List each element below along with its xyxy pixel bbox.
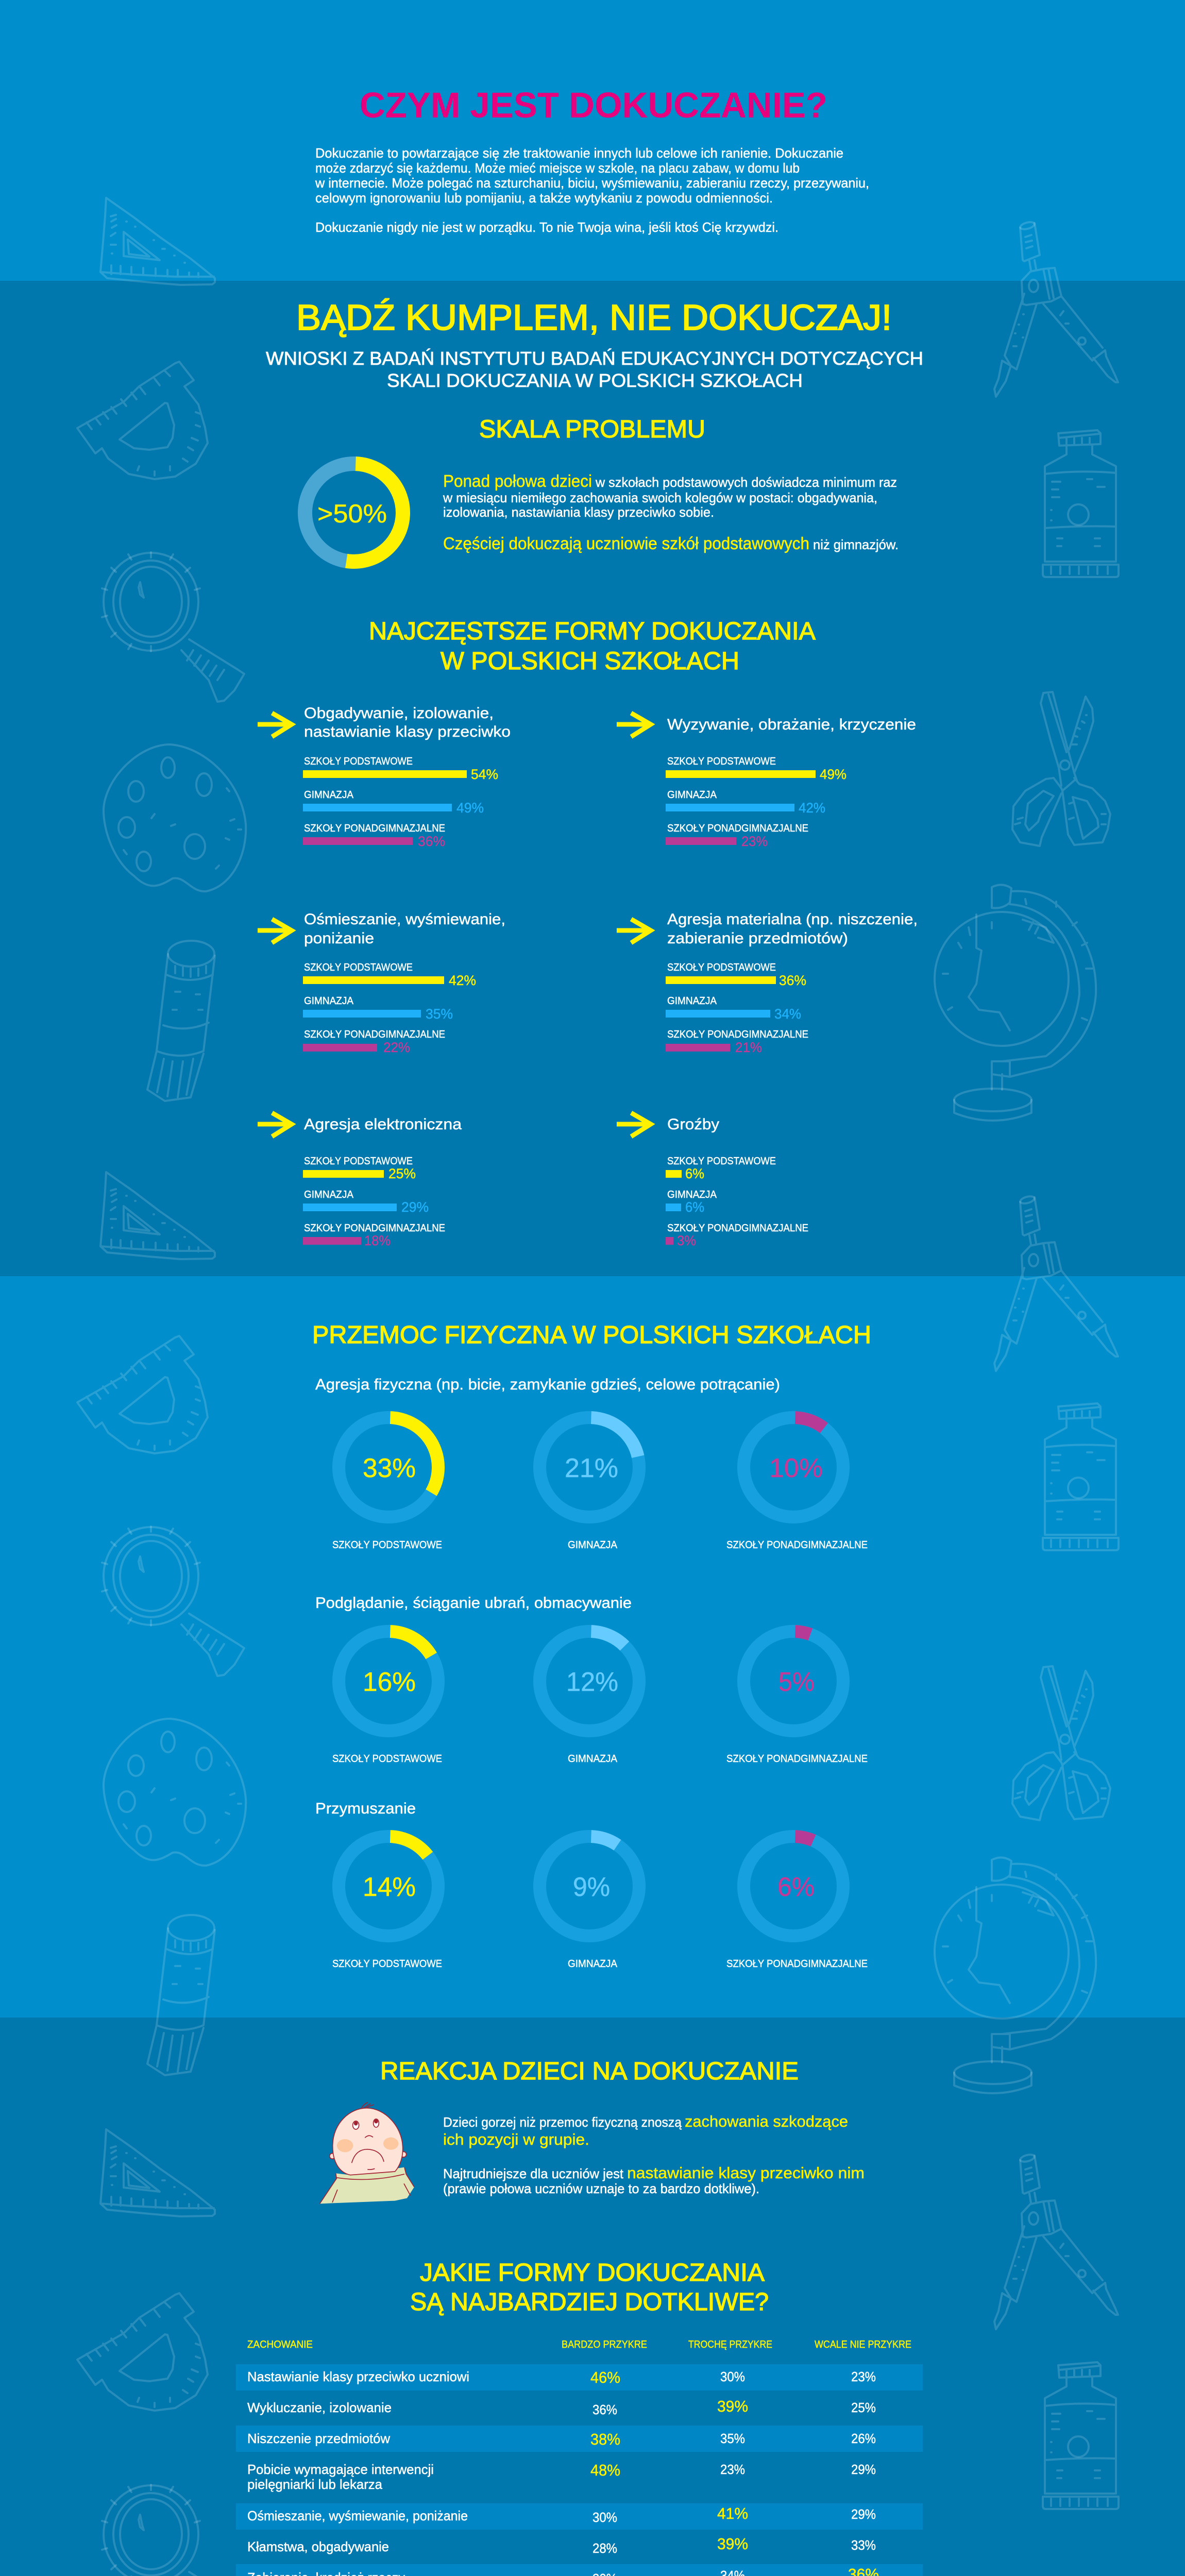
row 1: 46% bbox=[590, 2368, 620, 2386]
panel: groźby: SZKOŁY PODSTAWOWE bbox=[667, 1156, 776, 1167]
donut: przymuszanie podstawowe 14%: 14% bbox=[363, 1872, 416, 1902]
donut: agresja fizyczna gimnazja 21% bbox=[538, 1416, 641, 1551]
table header: WCALE NIE PRZYKRE bbox=[815, 2339, 911, 2350]
text block: reaction: ich pozycji w grupie. bbox=[443, 2130, 589, 2148]
row 6: 28% bbox=[592, 2540, 617, 2556]
panel: agresja elektroniczna: SZKOŁY PONADGIMNAZJALNE bbox=[304, 1223, 445, 1234]
panel: obgadywanie: 36% bbox=[418, 834, 445, 849]
panel: ośmieszanie: 35% bbox=[426, 1006, 453, 1022]
heading: przemoc fizyczna: PRZEMOC FIZYCZNA W POLSKICH SZKOŁACH bbox=[312, 1321, 871, 1349]
row 7 bbox=[236, 2564, 923, 2576]
text block: scale of the problem bbox=[443, 471, 899, 553]
icon: arrow bbox=[258, 713, 292, 737]
donut: przymuszanie gimnazja 9% bbox=[538, 1835, 641, 1970]
panel: agresja materialna: SZKOŁY PODSTAWOWE bbox=[667, 962, 776, 973]
row 2: 39% bbox=[717, 2397, 748, 2415]
text block: definition: Dokuczanie to powtarzające się złe traktowanie innych lub celowe ich ranienie. Dokuczanie bbox=[315, 145, 843, 161]
heading: najczęstsze formy dokuczania bbox=[369, 618, 816, 675]
main title: BĄDŹ KUMPLEM, NIE DOKUCZAJ! bbox=[296, 297, 892, 337]
icon: arrow bbox=[258, 919, 292, 943]
row 4: pielęgniarki lub lekarza bbox=[247, 2477, 383, 2492]
row 4 bbox=[247, 2461, 876, 2492]
panel: agresja materialna: zabieranie przedmiotów) bbox=[667, 930, 848, 947]
donut: more than 50% bbox=[303, 462, 404, 563]
row 2: Wykluczanie, izolowanie bbox=[247, 2400, 392, 2415]
donut: podglądanie podstawowe 16%: SZKOŁY PODSTAWOWE bbox=[332, 1753, 442, 1765]
panel: groźby: SZKOŁY PONADGIMNAZJALNE bbox=[667, 1223, 808, 1234]
table header: TROCHĘ PRZYKRE bbox=[688, 2339, 772, 2350]
heading: najczęstsze formy dokuczania: W POLSKICH SZKOŁACH bbox=[441, 648, 739, 675]
icon: arrow bbox=[258, 1113, 292, 1137]
panel: obgadywanie: SZKOŁY PODSTAWOWE bbox=[304, 756, 413, 767]
panel: agresja elektroniczna: 18% bbox=[364, 1233, 391, 1248]
panel: obgadywanie bbox=[258, 705, 511, 849]
row 6: Kłamstwa, obgadywanie bbox=[247, 2539, 389, 2554]
text block: reaction: (prawie połowa uczniów uznaje to za bardzo dotkliwe). bbox=[443, 2181, 759, 2196]
row 3 bbox=[236, 2426, 923, 2452]
heading: skala problemu: SKALA PROBLEMU bbox=[479, 416, 705, 443]
text block: scale of the problem: niż gimnazjów. bbox=[813, 537, 899, 552]
row 5: 30% bbox=[592, 2510, 617, 2525]
row 4: Pobicie wymagające interwencji bbox=[247, 2462, 434, 2477]
donut: agresja fizyczna podstawowe 33%: 33% bbox=[363, 1453, 416, 1483]
donut: przymuszanie ponadgimnazjalne 6%: 6% bbox=[777, 1872, 815, 1902]
row 1: 23% bbox=[851, 2369, 876, 2384]
panel: agresja elektroniczna: GIMNAZJA bbox=[304, 1189, 354, 1200]
text block: definition: Dokuczanie nigdy nie jest w porządku. To nie Twoja wina, jeśli ktoś Cię krzywdzi. bbox=[315, 219, 778, 235]
donut: podglądanie ponadgimnazjalne 5%: 5% bbox=[778, 1667, 815, 1697]
text block: definition: może zdarzyć się każdemu. Może mieć miejsce w szkole, na placu zabaw, w domu lub bbox=[315, 160, 800, 176]
donut: podglądanie podstawowe 16%: 16% bbox=[363, 1667, 416, 1697]
subtitle: WNIOSKI Z BADAŃ INSTYTUTU BADAŃ EDUKACYJNYCH DOTYCZĄCYCH bbox=[266, 348, 923, 369]
text block: reaction bbox=[443, 2112, 865, 2196]
donut: podglądanie gimnazja 12%: GIMNAZJA bbox=[568, 1753, 618, 1765]
row 1: 30% bbox=[720, 2369, 745, 2384]
text block: reaction: Najtrudniejsze dla uczniów jest bbox=[443, 2166, 624, 2181]
text block: definition bbox=[315, 145, 869, 235]
donut: agresja fizyczna podstawowe 33%: SZKOŁY PODSTAWOWE bbox=[332, 1539, 442, 1551]
panel: ośmieszanie: SZKOŁY PONADGIMNAZJALNE bbox=[304, 1029, 445, 1040]
text block: scale of the problem: Częściej dokuczają uczniowie szkół podstawowych bbox=[443, 534, 809, 553]
donut: przymuszanie gimnazja 9%: 9% bbox=[573, 1872, 610, 1902]
heading: jakie formy: SĄ NAJBARDZIEJ DOTKLIWE? bbox=[410, 2289, 769, 2316]
panel: groźby: 6% bbox=[685, 1166, 704, 1181]
subheading: przymuszanie: Przymuszanie bbox=[315, 1800, 416, 1817]
heading: jakie formy bbox=[410, 2259, 769, 2316]
panel: ośmieszanie: 42% bbox=[449, 973, 476, 988]
row 3: Niszczenie przedmiotów bbox=[247, 2431, 390, 2446]
panel: obgadywanie: GIMNAZJA bbox=[304, 789, 354, 801]
panel: agresja elektroniczna: SZKOŁY PODSTAWOWE bbox=[304, 1156, 413, 1167]
donut: podglądanie gimnazja 12% bbox=[538, 1630, 641, 1765]
panel: wyzywanie: GIMNAZJA bbox=[667, 789, 717, 801]
donut: agresja fizyczna podstawowe 33% bbox=[332, 1416, 442, 1551]
heading: najczęstsze formy dokuczania: NAJCZĘSTSZE FORMY DOKUCZANIA bbox=[369, 618, 816, 645]
text block: reaction: Dzieci gorzej niż przemoc fizyczną znoszą bbox=[443, 2114, 682, 2130]
panel: groźby bbox=[617, 1113, 808, 1248]
donut: przymuszanie ponadgimnazjalne 6% bbox=[726, 1835, 868, 1970]
panel: groźby: Groźby bbox=[667, 1116, 719, 1133]
row 4: 29% bbox=[851, 2462, 876, 2477]
subtitle: SKALI DOKUCZANIA W POLSKICH SZKOŁACH bbox=[387, 370, 803, 391]
donut: przymuszanie podstawowe 14% bbox=[332, 1835, 442, 1970]
row 2: 36% bbox=[592, 2402, 617, 2417]
row 3: 38% bbox=[590, 2430, 620, 2448]
panel: ośmieszanie: SZKOŁY PODSTAWOWE bbox=[304, 962, 413, 973]
donut: przymuszanie ponadgimnazjalne 6%: SZKOŁY PONADGIMNAZJALNE bbox=[726, 1958, 868, 1970]
donut: agresja fizyczna gimnazja 21%: GIMNAZJA bbox=[568, 1539, 618, 1551]
panel: wyzywanie: 49% bbox=[820, 767, 847, 782]
subheading: podglądanie: Podglądanie, ściąganie ubrań, obmacywanie bbox=[315, 1595, 632, 1612]
panel: agresja elektroniczna: 25% bbox=[388, 1166, 416, 1181]
donut: podglądanie ponadgimnazjalne 5%: SZKOŁY PONADGIMNAZJALNE bbox=[726, 1753, 868, 1765]
row 5: 29% bbox=[851, 2506, 876, 2522]
donut: podglądanie gimnazja 12%: 12% bbox=[566, 1667, 618, 1697]
row 3: 35% bbox=[720, 2431, 745, 2446]
panel: obgadywanie: 49% bbox=[456, 800, 484, 816]
panel: groźby: 3% bbox=[677, 1233, 696, 1248]
text block: definition: celowym ignorowaniu lub pomijaniu, a także wytykaniu z powodu odmienności. bbox=[315, 190, 773, 206]
text block: reaction: nastawianie klasy przeciwko nim bbox=[627, 2164, 865, 2182]
donut: agresja fizyczna gimnazja 21%: 21% bbox=[565, 1453, 618, 1483]
row 1 bbox=[236, 2364, 923, 2391]
panel: wyzywanie: SZKOŁY PONADGIMNAZJALNE bbox=[667, 823, 808, 834]
panel: agresja materialna: Agresja materialna (np. niszczenie, bbox=[667, 911, 918, 928]
row 5 bbox=[236, 2503, 923, 2530]
panel: obgadywanie: SZKOŁY PONADGIMNAZJALNE bbox=[304, 823, 445, 834]
panel: agresja materialna bbox=[617, 911, 918, 1055]
text block: scale of the problem: izolowania, nastawiania klasy przeciwko sobie. bbox=[443, 504, 714, 520]
icon: arrow bbox=[617, 713, 651, 737]
row 6 bbox=[247, 2535, 876, 2556]
table header: BARDZO PRZYKRE bbox=[562, 2339, 647, 2350]
donut: przymuszanie podstawowe 14%: SZKOŁY PODSTAWOWE bbox=[332, 1958, 442, 1970]
subtitle bbox=[266, 348, 923, 391]
panel: ośmieszanie: poniżanie bbox=[304, 930, 374, 947]
text block: definition: w internecie. Może polegać na szturchaniu, biciu, wyśmiewaniu, zabieraniu rzeczy, przezywaniu, bbox=[315, 175, 869, 191]
panel: wyzywanie: 42% bbox=[799, 800, 825, 816]
row 4: 23% bbox=[720, 2462, 745, 2477]
donut: podglądanie podstawowe 16% bbox=[332, 1630, 442, 1765]
donut: more than 50%: >50% bbox=[317, 499, 387, 528]
row 5: Ośmieszanie, wyśmiewanie, poniżanie bbox=[247, 2508, 468, 2523]
panel: wyzywanie: SZKOŁY PODSTAWOWE bbox=[667, 756, 776, 767]
panel: wyzywanie bbox=[617, 713, 916, 849]
row 5: 41% bbox=[717, 2504, 748, 2522]
title: czym jest dokuczanie: CZYM JEST DOKUCZANIE? bbox=[360, 85, 827, 125]
panel: agresja materialna: GIMNAZJA bbox=[667, 995, 717, 1007]
panel: obgadywanie: Obgadywanie, izolowanie, bbox=[304, 705, 494, 722]
donut: agresja fizyczna ponadgimnazjalne 10% bbox=[726, 1416, 868, 1551]
row 2: 25% bbox=[851, 2400, 876, 2415]
text block: scale of the problem: w szkołach podstawowych doświadcza minimum raz bbox=[595, 474, 897, 490]
subheading: agresja fizyczna: Agresja fizyczna (np. bicie, zamykanie gdzieś, celowe potrącanie) bbox=[315, 1376, 780, 1393]
table: forms of bullying bbox=[236, 2339, 923, 2576]
row 6: 39% bbox=[717, 2535, 748, 2553]
heading: reakcja dzieci: REAKCJA DZIECI NA DOKUCZANIE bbox=[380, 2058, 799, 2085]
panel: groźby: GIMNAZJA bbox=[667, 1189, 717, 1200]
row 1: Nastawianie klasy przeciwko uczniowi bbox=[247, 2369, 469, 2384]
panel: wyzywanie: Wyzywanie, obrażanie, krzyczenie bbox=[667, 716, 916, 733]
row 2 bbox=[247, 2397, 876, 2417]
donut: agresja fizyczna ponadgimnazjalne 10%: 10% bbox=[769, 1453, 823, 1483]
panel: agresja elektroniczna: 29% bbox=[401, 1199, 429, 1215]
panel: obgadywanie: 54% bbox=[471, 767, 498, 782]
panel: agresja elektroniczna bbox=[258, 1113, 462, 1248]
donut: przymuszanie gimnazja 9%: GIMNAZJA bbox=[568, 1958, 618, 1970]
row 6: 33% bbox=[851, 2537, 876, 2553]
row 4: 48% bbox=[590, 2461, 620, 2479]
panel: ośmieszanie bbox=[258, 911, 505, 1055]
text block: reaction: zachowania szkodzące bbox=[685, 2112, 848, 2130]
table header: ZACHOWANIE bbox=[247, 2339, 313, 2350]
panel: ośmieszanie: Ośmieszanie, wyśmiewanie, bbox=[304, 911, 505, 928]
icon: arrow bbox=[617, 1113, 651, 1137]
panel: agresja materialna: 36% bbox=[779, 973, 806, 988]
icon: arrow bbox=[617, 919, 651, 943]
panel: groźby: 6% bbox=[685, 1199, 704, 1215]
panel: agresja elektroniczna: Agresja elektroniczna bbox=[304, 1116, 462, 1133]
text block: scale of the problem: Ponad połowa dzieci bbox=[443, 471, 592, 490]
panel: agresja materialna: 34% bbox=[774, 1006, 801, 1022]
row 3: 26% bbox=[851, 2431, 876, 2446]
donut: agresja fizyczna ponadgimnazjalne 10%: SZKOŁY PONADGIMNAZJALNE bbox=[726, 1539, 868, 1551]
panel: ośmieszanie: GIMNAZJA bbox=[304, 995, 354, 1007]
panel: agresja materialna: 21% bbox=[735, 1040, 762, 1055]
icon: sad child bbox=[320, 2103, 414, 2204]
panel: obgadywanie: nastawianie klasy przeciwko bbox=[304, 723, 511, 740]
heading: jakie formy: JAKIE FORMY DOKUCZANIA bbox=[420, 2259, 765, 2286]
table header bbox=[247, 2339, 911, 2350]
panel: wyzywanie: 23% bbox=[741, 834, 768, 849]
donut: podglądanie ponadgimnazjalne 5% bbox=[726, 1630, 868, 1765]
panel: agresja materialna: SZKOŁY PONADGIMNAZJALNE bbox=[667, 1029, 808, 1040]
text block: scale of the problem: w miesiącu niemiłego zachowania swoich kolegów w postaci: obgadywania, bbox=[443, 490, 877, 505]
panel: ośmieszanie: 22% bbox=[383, 1040, 410, 1055]
